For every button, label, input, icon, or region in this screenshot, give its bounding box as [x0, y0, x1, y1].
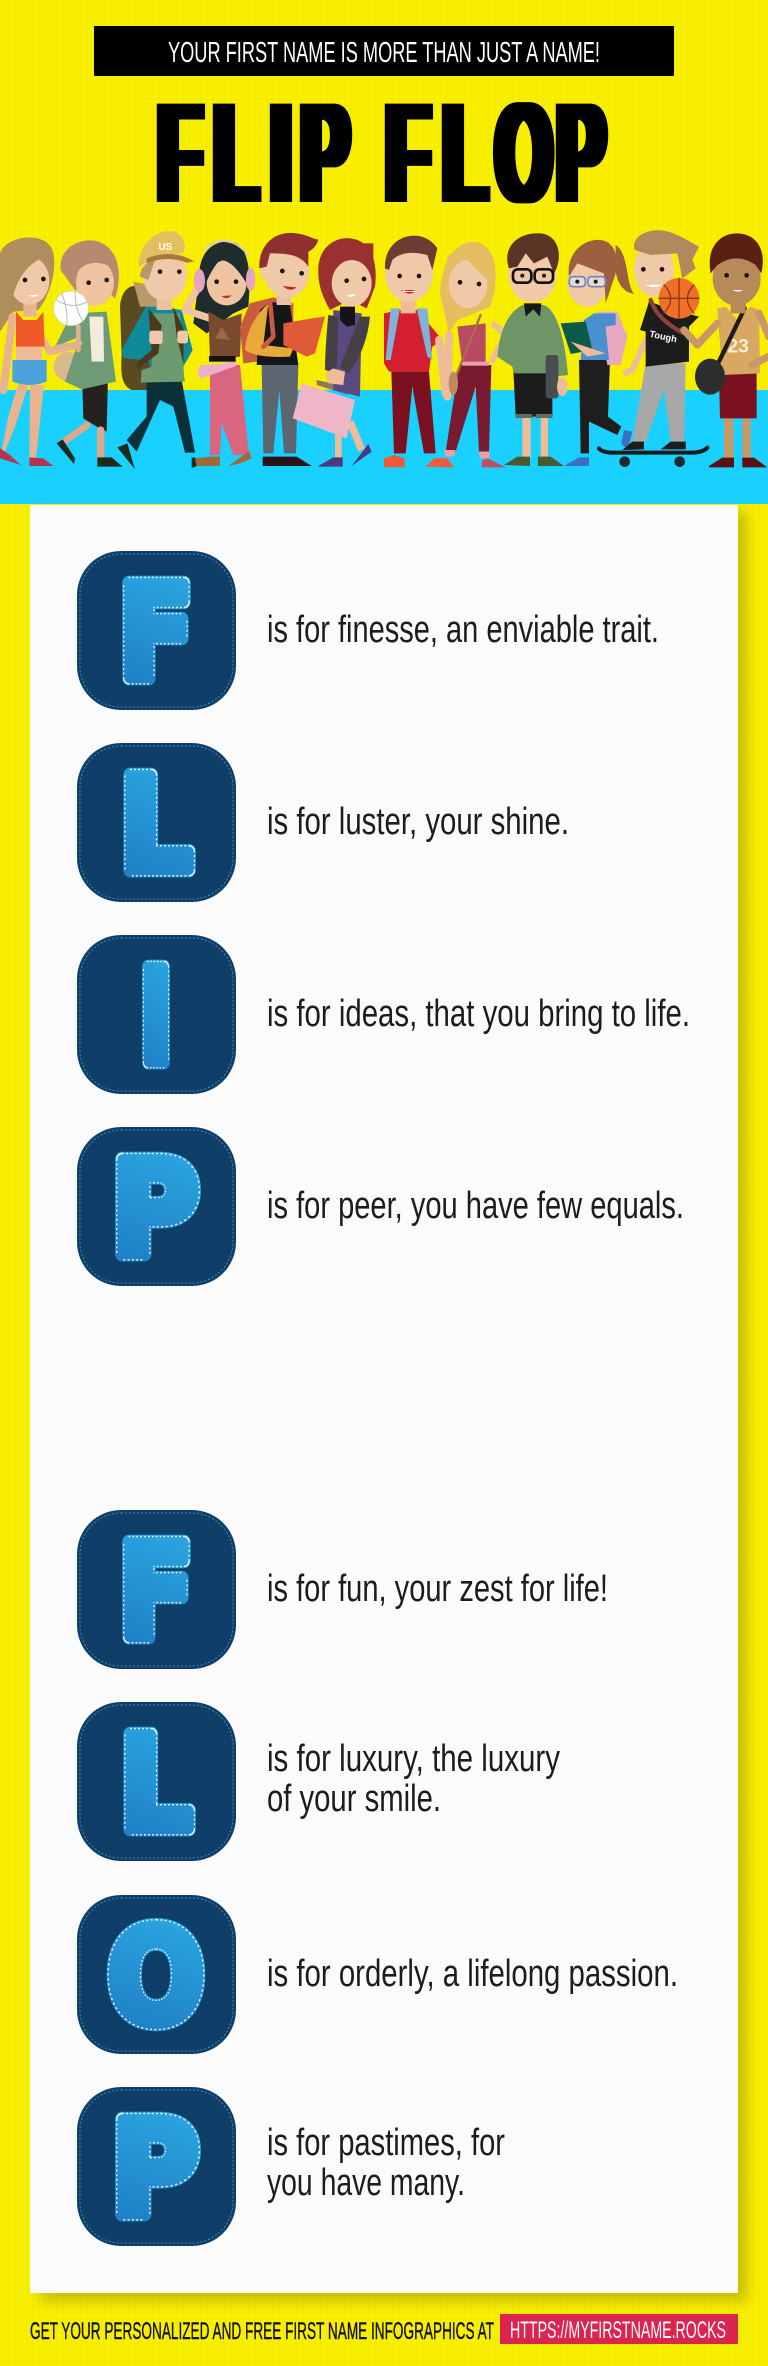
row: P pastimes	[77, 2087, 505, 2246]
left half of students	[0, 231, 376, 469]
text line: is for finesse, an enviable trait.	[267, 609, 659, 651]
icon: letter L: L	[120, 749, 192, 901]
student 10: girl with ponytail and tablet	[561, 240, 634, 466]
illustration: group of students	[0, 230, 768, 469]
icon: letter O	[77, 1895, 236, 2054]
text line: is for luster, your shine.	[267, 801, 569, 843]
student 12: boy in tank top number 23: 23	[727, 337, 749, 358]
icon: letter P: P	[111, 1133, 199, 1285]
row: L luster	[77, 743, 569, 902]
right half of students	[384, 230, 768, 467]
text block: is for pastimes, for	[267, 2122, 505, 2164]
text block: you have many.	[267, 2162, 465, 2204]
icon: letter P	[77, 2087, 236, 2246]
icon: letter L: L	[120, 1708, 192, 1860]
icon: letter F: F	[118, 557, 194, 709]
floor band	[0, 390, 768, 504]
icon: letter I	[77, 935, 236, 1094]
text block	[267, 2122, 505, 2204]
icon: letter P: P	[111, 2093, 199, 2245]
icon: letter O: O	[108, 1901, 204, 2053]
icon: letter F: F	[118, 1516, 194, 1668]
icon: letter O: O	[108, 1901, 204, 2053]
student 3: boy with cap and backpack: US	[158, 242, 173, 253]
icon: letter F: F	[118, 1516, 194, 1668]
icon: letter I: I	[139, 941, 173, 1093]
icon: letter L: L	[120, 749, 192, 901]
icon: letter L: L	[120, 1708, 192, 1860]
icon: letter O: O	[108, 1901, 204, 2053]
student 4: girl with pink headphones	[185, 241, 255, 466]
icon: letter F: F	[118, 1516, 194, 1668]
student 3: boy with cap and backpack	[117, 231, 210, 469]
icon: letter F: F	[118, 557, 194, 709]
text block	[267, 1738, 560, 1820]
icon: letter L: L	[120, 1708, 192, 1860]
icon: letter P: P	[111, 1133, 199, 1285]
student 9: boy with glasses and green sweater	[497, 233, 568, 466]
icon: letter F	[77, 1510, 236, 1669]
text line: is for fun, your zest for life!	[267, 1568, 608, 1610]
student 2: girl with volleyball and green jacket	[54, 240, 123, 467]
row: L luxury	[77, 1702, 560, 1861]
student 1: girl in orange top	[0, 238, 78, 466]
text block: of your smile.	[267, 1778, 441, 1820]
student 12: boy in tank top number 23	[684, 233, 768, 467]
icon: letter L: L	[120, 749, 192, 901]
header banner	[94, 26, 674, 76]
icon: letter P: P	[111, 2093, 199, 2245]
footer	[30, 2314, 738, 2345]
icon: letter P	[77, 1127, 236, 1286]
student 5: boy with red hair and open book	[240, 233, 325, 466]
student 11: boy on skateboard with basketball	[599, 230, 707, 467]
icon: letter L	[77, 1702, 236, 1861]
row: P peer	[77, 1127, 684, 1286]
icon: letter F: F	[118, 557, 194, 709]
icon: letter I: I	[139, 941, 173, 1093]
student 6: girl with pink handbag	[293, 238, 376, 467]
row: O orderly	[77, 1895, 678, 2054]
title: FLIP FLOP	[158, 73, 605, 232]
student 11: boy on skateboard with basketball: Tough	[649, 329, 678, 344]
icon: letter I: I	[139, 941, 173, 1093]
row: I ideas	[77, 935, 690, 1094]
row: F finesse	[77, 551, 659, 710]
student 8: blonde girl with shoulder bag	[440, 242, 506, 467]
text block: is for luxury, the luxury	[267, 1738, 560, 1780]
student 7: boy in red shirt with blue backpack straps	[384, 236, 454, 467]
icon: letter L	[77, 743, 236, 902]
icon: letter P: P	[111, 1133, 199, 1285]
row: F fun	[77, 1510, 608, 1669]
panel: letters card	[30, 505, 748, 2302]
icon: letter F	[77, 551, 236, 710]
icon: letter P: P	[111, 2093, 199, 2245]
